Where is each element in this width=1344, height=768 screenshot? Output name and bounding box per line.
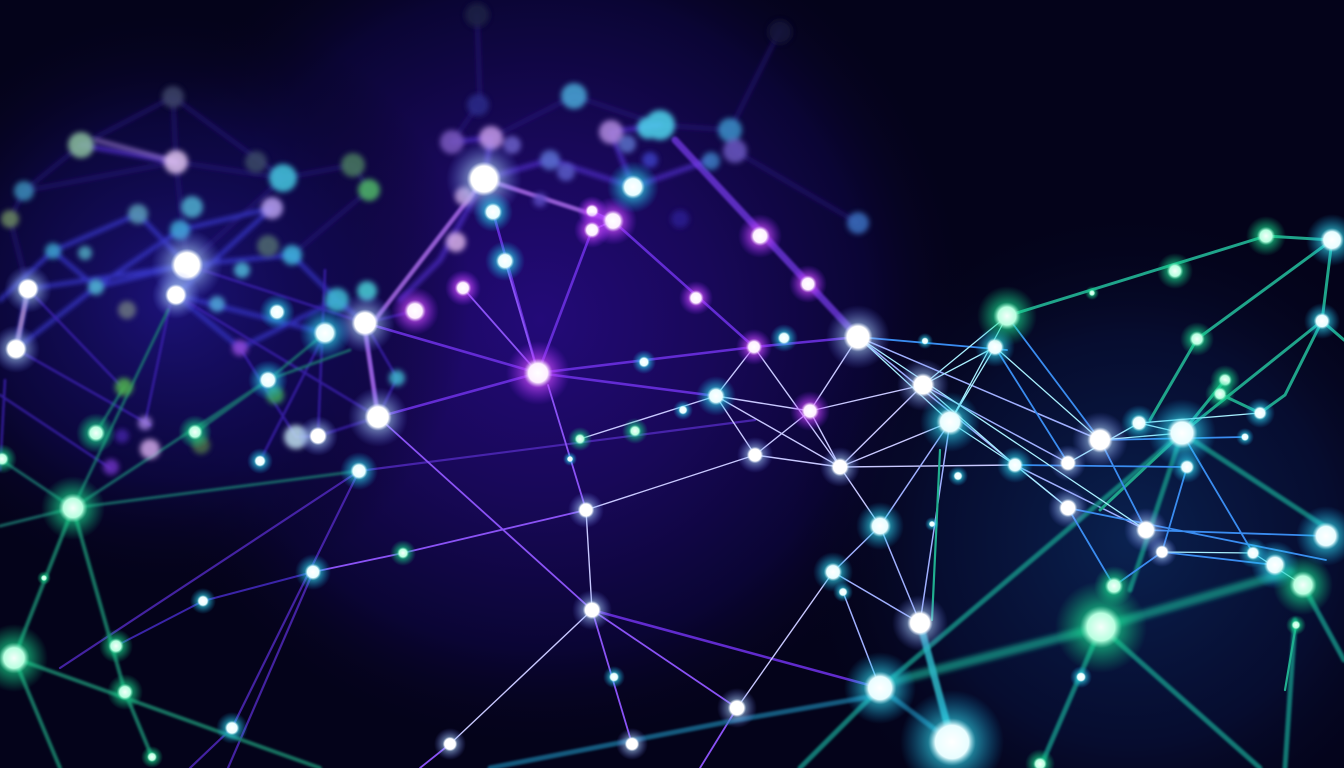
nodes: cyan glow — [190, 161, 1344, 744]
nodes: purple glow — [391, 196, 830, 431]
main purple links — [60, 140, 1146, 768]
mid network links: left cluster — [0, 265, 415, 526]
bottom-left green links — [14, 508, 320, 768]
blurred background nodes — [1, 3, 869, 475]
right side teal links — [490, 236, 1344, 768]
nodes: green glow — [0, 216, 1333, 768]
far background links, blurred — [0, 15, 858, 349]
